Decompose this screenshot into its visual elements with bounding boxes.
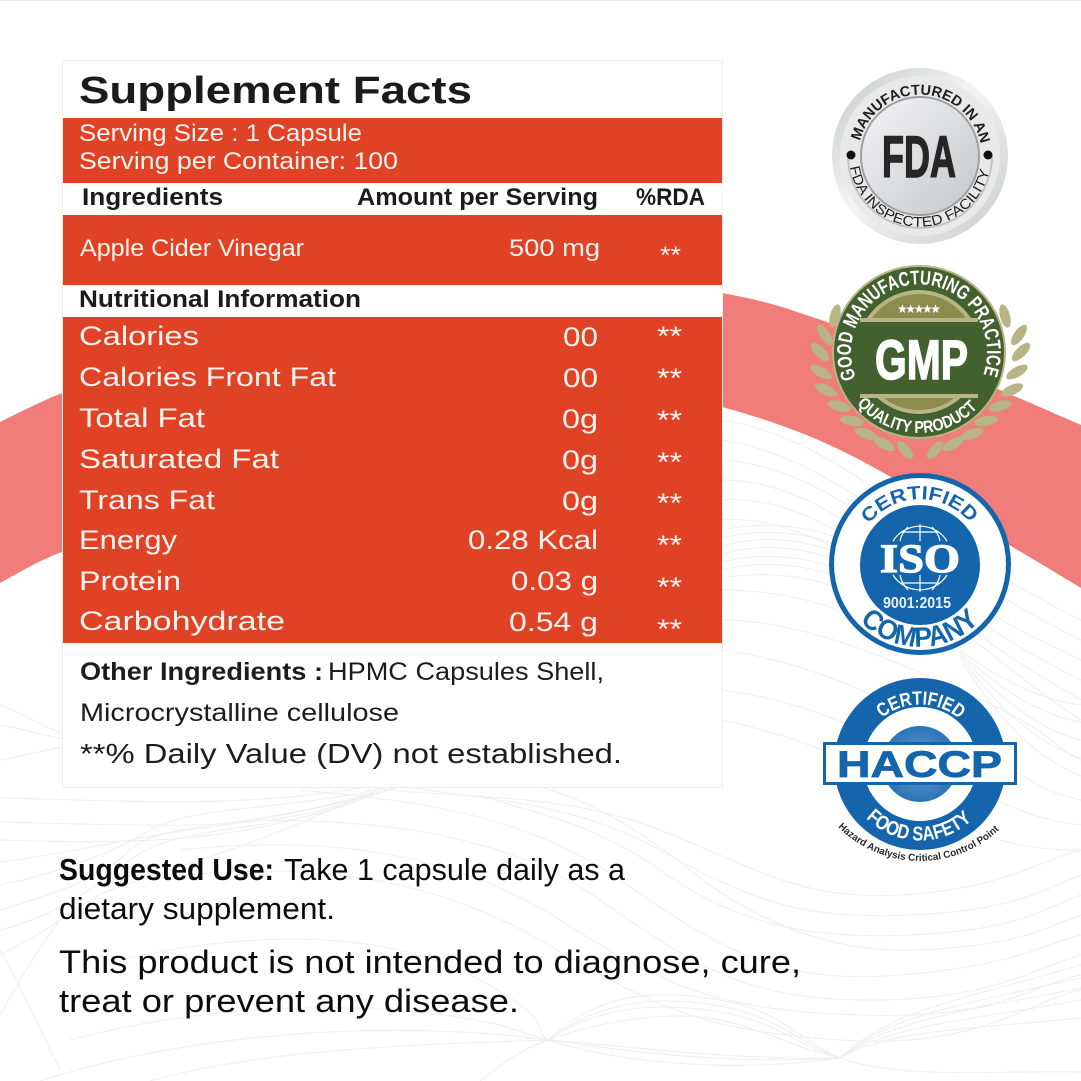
nutrition rows: Saturated Fat: [79, 444, 280, 474]
nutrition rows: **: [657, 363, 683, 393]
ingredient row: Apple Cider Vinegar: [80, 235, 304, 262]
nutrition rows: Calories Front Fat: [79, 362, 337, 392]
nutrition rows: 0g: [562, 445, 598, 475]
icon: ISO badge: [829, 473, 1011, 655]
ingredient row: 500 mg: [509, 235, 600, 262]
nutrition rows: [63, 317, 722, 644]
suggested use text: dietary supplement.: [59, 891, 335, 926]
suggested use text: [59, 852, 626, 926]
nutrition rows: 0.28 Kcal: [468, 525, 598, 555]
icon: ISO badge: CERTIFIED: [862, 486, 976, 521]
nutrition rows: 00: [563, 322, 598, 352]
serving information band: Serving per Container: 100: [79, 148, 398, 175]
nutrition rows: 0g: [562, 486, 598, 516]
disclaimer text: treat or prevent any disease.: [59, 983, 519, 1019]
nutrition rows: **: [657, 614, 683, 644]
icon: FDA badge: FDA: [882, 125, 956, 190]
laurel wreath: [808, 303, 1033, 462]
nutrition rows: 0.54 g: [509, 607, 598, 637]
suggested use text: Suggested Use:: [59, 852, 274, 887]
nutrition rows: **: [657, 405, 683, 435]
panel: supplement facts table: [62, 60, 722, 788]
disclaimer text: This product is not intended to diagnose, cure,: [59, 944, 801, 980]
suggested use text: Take 1 capsule daily as a: [284, 852, 626, 887]
icon: FDA badge: MANUFACTURED IN AN: [850, 84, 990, 143]
icon: FDA badge: [832, 68, 1008, 244]
icon: GMP badge: GMP: [875, 328, 968, 391]
column headers: [82, 184, 705, 211]
icon: GMP badge: GOOD MANUFACTURING PRACTICE: [837, 270, 1001, 380]
other ingredients note: Other Ingredients :: [80, 658, 323, 686]
nutritional information heading: Nutritional Information: [79, 286, 361, 313]
icon: HACCP badge: FOOD SAFETY: [866, 808, 969, 841]
serving information band: [63, 118, 722, 183]
icon: HACCP badge: HACCP: [837, 744, 1002, 785]
nutrition rows: Total Fat: [79, 403, 206, 433]
other ingredients note: **% Daily Value (DV) not established.: [80, 738, 622, 769]
nutrition rows: Protein: [79, 566, 181, 596]
nutrition rows: Energy: [79, 525, 178, 555]
icon: HACCP badge: CERTIFIED: [877, 691, 964, 716]
icon: ISO badge: ISO: [880, 536, 960, 581]
nutrition rows: Carbohydrate: [79, 606, 285, 636]
background wave line pattern: [0, 420, 1081, 1081]
icon: GMP badge: [810, 265, 1030, 459]
nutrition rows: 0.03 g: [511, 566, 598, 596]
column headers: %RDA: [636, 184, 705, 211]
serving information band: Serving Size : 1 Capsule: [79, 120, 362, 147]
nutrition rows: **: [657, 530, 683, 560]
nutrition rows: Calories: [79, 321, 199, 351]
other ingredients note: [80, 658, 622, 769]
nutrition rows: **: [657, 488, 683, 518]
nutrition rows: **: [657, 572, 683, 602]
disclaimer text: [59, 944, 801, 1019]
icon: HACCP badge: Hazard Analysis Critical Control Point: [838, 822, 999, 861]
other ingredients note: Microcrystalline cellulose: [80, 699, 399, 727]
icon: ISO badge: COMPANY: [864, 607, 974, 647]
ingredient row: **: [660, 242, 681, 269]
icon: HACCP badge: [823, 678, 1017, 861]
nutrition rows: Trans Fat: [79, 485, 216, 515]
column headers: Amount per Serving: [357, 184, 598, 211]
globe lines: [893, 524, 947, 592]
nutrition rows: **: [657, 321, 683, 351]
ingredient row: [63, 215, 722, 285]
red swoosh band: [0, 293, 1081, 588]
icon: FDA badge: FDA INSPECTED FACILITY: [850, 166, 988, 227]
nutrition rows: **: [657, 447, 683, 477]
icon: GMP badge: ★★★★★: [897, 302, 941, 316]
other ingredients note: HPMC Capsules Shell,: [328, 658, 604, 686]
title: Supplement Facts: [79, 70, 472, 112]
nutrition rows: 00: [563, 363, 598, 393]
icon: ISO badge: 9001:2015: [883, 595, 951, 612]
icon: GMP badge: QUALITY PRODUCT: [859, 398, 976, 433]
nutrition rows: 0g: [562, 404, 598, 434]
column headers: Ingredients: [82, 184, 223, 211]
